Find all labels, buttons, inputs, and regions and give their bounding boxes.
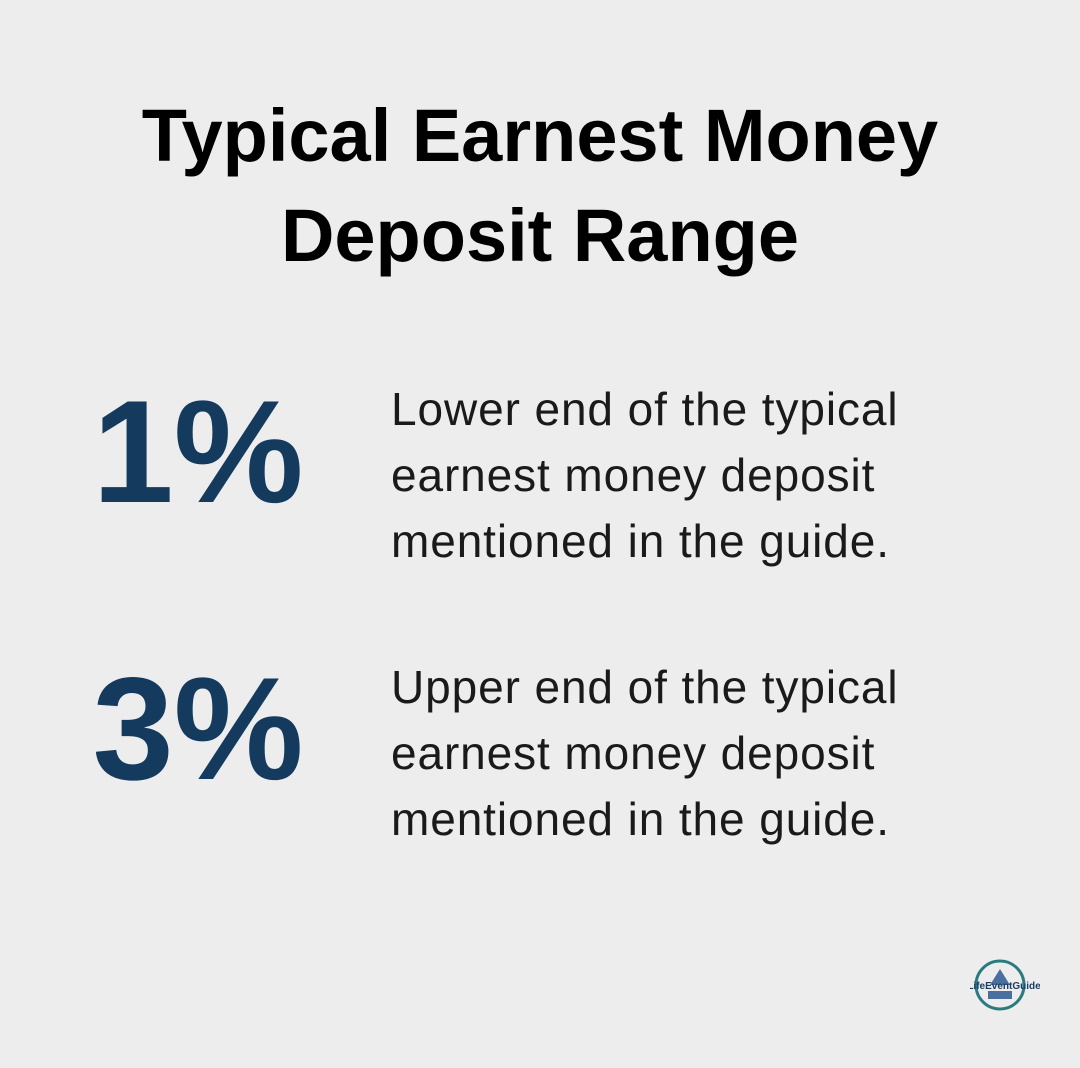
- logo: LifeEventGuide: [970, 960, 1040, 1010]
- text: lower end: Lower end of the typical: [391, 383, 898, 435]
- title: Typical Earnest Money: [142, 94, 938, 177]
- text: upper end: [391, 661, 898, 845]
- stat: 3%: 3%: [92, 647, 304, 810]
- title: [142, 94, 938, 277]
- text: upper end: earnest money deposit: [391, 727, 875, 779]
- text: upper end: mentioned in the guide.: [391, 793, 890, 845]
- title: Deposit Range: [281, 194, 799, 277]
- text: upper end: Upper end of the typical: [391, 661, 898, 713]
- stat: 1%: 1%: [92, 370, 304, 533]
- text: lower end: mentioned in the guide.: [391, 515, 890, 567]
- text: lower end: earnest money deposit: [391, 449, 875, 501]
- text: lower end: [391, 383, 898, 567]
